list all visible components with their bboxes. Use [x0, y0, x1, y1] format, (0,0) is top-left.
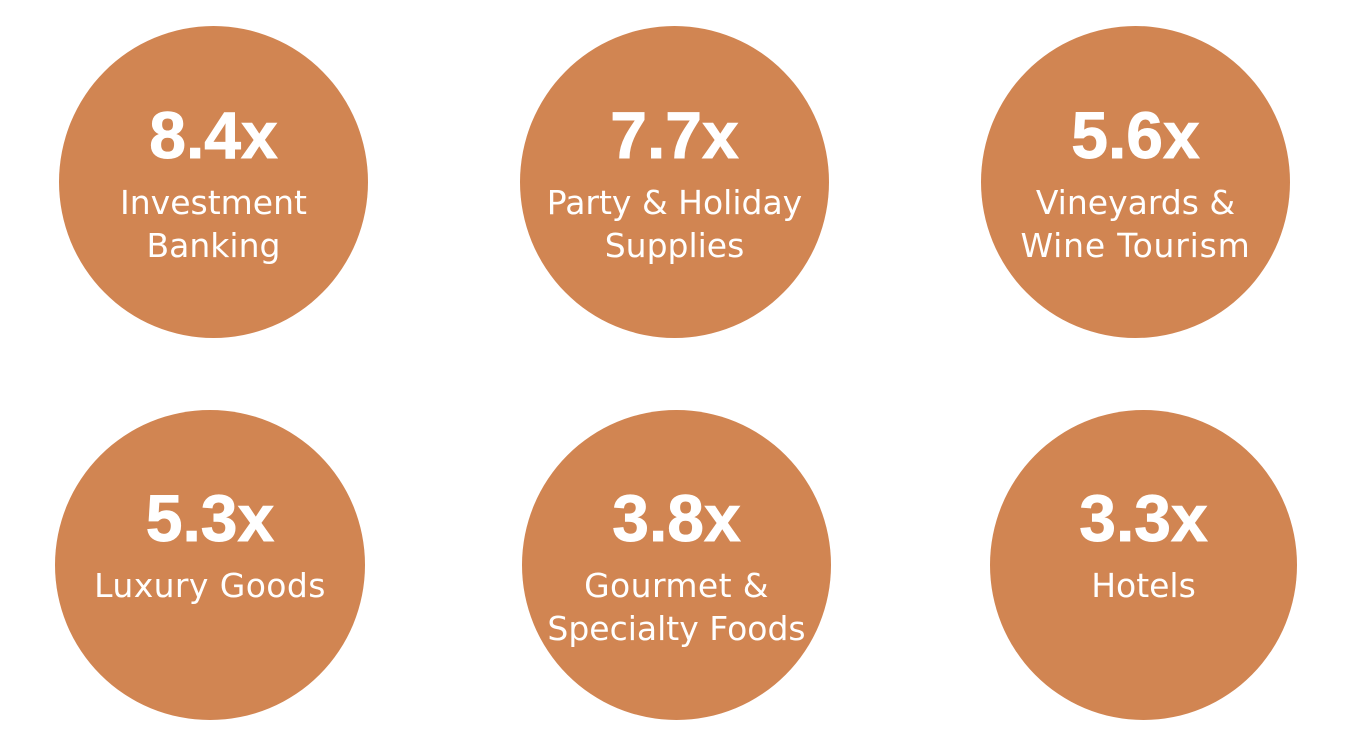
label: Hotels: Hotels [1091, 566, 1196, 605]
label: Gourmet & Specialty Foods: Specialty Foods [547, 609, 806, 648]
label: Investment Banking: Banking [147, 226, 280, 265]
label: Investment Banking: Investment [120, 183, 307, 222]
circle: Party & Holiday Supplies 7.7x [520, 26, 829, 338]
circle: Gourmet & Specialty Foods 3.8x [522, 410, 831, 720]
label: Vineyards & Wine Tourism: Wine Tourism [1020, 226, 1251, 265]
value: 5.6x: 5.6x [1071, 98, 1200, 172]
label: Luxury Goods: Luxury Goods [94, 566, 326, 605]
circle: Luxury Goods 5.3x [55, 410, 365, 720]
label: Gourmet & Specialty Foods: Gourmet & [584, 566, 769, 605]
value: 7.7x: 7.7x [610, 98, 739, 172]
circle: Investment Banking 8.4x [59, 26, 368, 338]
value: 3.8x: 3.8x [612, 481, 741, 555]
label: Investment Banking [120, 183, 307, 265]
circle: Hotels 3.3x [990, 410, 1297, 720]
value: 3.3x: 3.3x [1079, 481, 1208, 555]
value: 8.4x: 8.4x [149, 98, 278, 172]
label: Vineyards & Wine Tourism [1020, 183, 1251, 265]
label: Party & Holiday Supplies: Supplies [605, 226, 744, 265]
label: Party & Holiday Supplies: Party & Holiday [547, 183, 802, 222]
label: Gourmet & Specialty Foods [547, 566, 806, 648]
circle: Vineyards & Wine Tourism 5.6x [981, 26, 1290, 338]
value: 5.3x: 5.3x [146, 481, 274, 555]
label: Party & Holiday Supplies [547, 183, 802, 265]
label: Vineyards & Wine Tourism: Vineyards & [1036, 183, 1235, 222]
